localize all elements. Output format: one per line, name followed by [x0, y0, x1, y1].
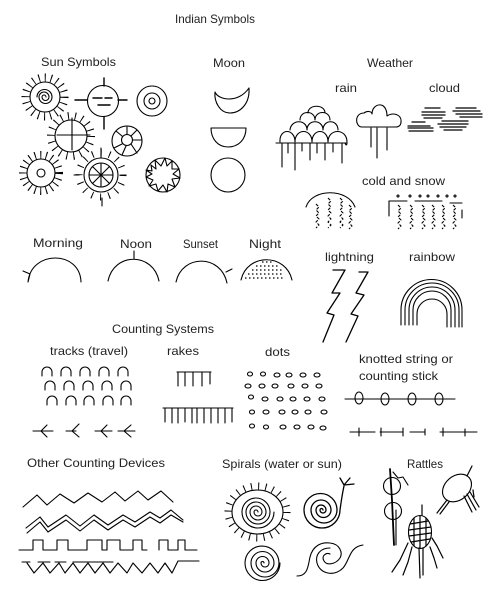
icon: ring sun: [23, 155, 59, 191]
icon: night arc: [241, 260, 292, 280]
icon: zigzag with bar: [22, 561, 199, 573]
title: Indian Symbols: [175, 12, 255, 26]
icon: half moon: [211, 128, 246, 147]
heading: rattles: Rattles: [407, 457, 443, 471]
icon: morning arc: [23, 258, 81, 282]
icon: counting stick: [350, 428, 477, 436]
icon: rain cloud large: [276, 106, 347, 170]
icon: spiral sun: [26, 78, 64, 116]
icon: zigzag sun: [146, 158, 180, 192]
icon: square wave line: [19, 540, 197, 550]
label: rakes: rakes: [167, 344, 199, 358]
label: sunset: Sunset: [183, 237, 219, 251]
panel: rattles: [384, 457, 479, 578]
label: rainbow: rainbow: [409, 250, 455, 264]
heading: spirals: Spirals (water or sun): [222, 457, 342, 471]
panel: other counting devices: [19, 456, 199, 573]
icon: wheel sun: [112, 126, 142, 156]
label: rain: rain: [335, 81, 357, 95]
panel: spirals: [222, 457, 363, 580]
icon: spoked sun: [74, 148, 123, 206]
icon: double zigzag line: [26, 510, 183, 533]
icon: sunset arc: [176, 261, 232, 283]
label: lightning: lightning: [325, 250, 374, 264]
icon: layered clouds: [408, 108, 482, 131]
icon: crescent moon: [215, 88, 249, 113]
icon: wave spiral: [297, 543, 363, 576]
icon: track arches: [42, 367, 131, 405]
icon: snow: [389, 195, 462, 229]
label: night: Night: [249, 237, 282, 251]
label: knotted string or counting stick: knotted string or: [359, 352, 453, 366]
label: cold and snow: cold and snow: [362, 174, 445, 188]
label: tracks: tracks (travel): [50, 344, 128, 358]
icon: noon arc: [108, 251, 159, 281]
icon: knotted string: [345, 392, 455, 405]
panel: moon: [211, 56, 249, 192]
heading: other counting devices: Other Counting Devices: [27, 456, 165, 470]
icon: small spiral: [245, 546, 280, 580]
panel: times of day: [23, 236, 292, 283]
label: cloud: cloud: [429, 81, 460, 95]
icon: concentric sun: [137, 86, 167, 116]
icon: cold dome: [306, 193, 355, 229]
panel: weather: [276, 56, 482, 342]
icon: netted rattle: [392, 505, 443, 578]
heading: sun symbols: Sun Symbols: [41, 55, 116, 69]
label: morning: Morning: [33, 236, 83, 250]
icon: cross sun: [51, 116, 91, 156]
icon: rakes: [163, 372, 233, 423]
label: dots: dots: [265, 345, 290, 359]
heading: weather: Weather: [367, 56, 413, 70]
icon: rainbow: [401, 279, 462, 327]
heading: moon: Moon: [213, 56, 245, 70]
label: noon: Noon: [120, 237, 152, 251]
heading: counting systems: Counting Systems: [112, 322, 214, 336]
icon: sun with face: [75, 78, 127, 129]
icon: double gourd rattle: [384, 469, 408, 545]
icon: snail spiral: [304, 478, 354, 528]
icon: lightning bolts: [323, 270, 368, 342]
icon: dots grid: [245, 372, 327, 430]
icon: zigzag line: [23, 491, 173, 507]
label: counting stick: counting stick: [359, 369, 439, 383]
panel: counting systems: [33, 322, 477, 437]
icon: bird tracks: [33, 424, 135, 437]
icon: rain cloud small: [357, 105, 401, 158]
icon: oval rattle: [437, 466, 479, 514]
icon: full moon: [211, 158, 245, 192]
panel: sun symbols: [23, 55, 180, 206]
icon: rayed spiral sun: [228, 486, 287, 538]
